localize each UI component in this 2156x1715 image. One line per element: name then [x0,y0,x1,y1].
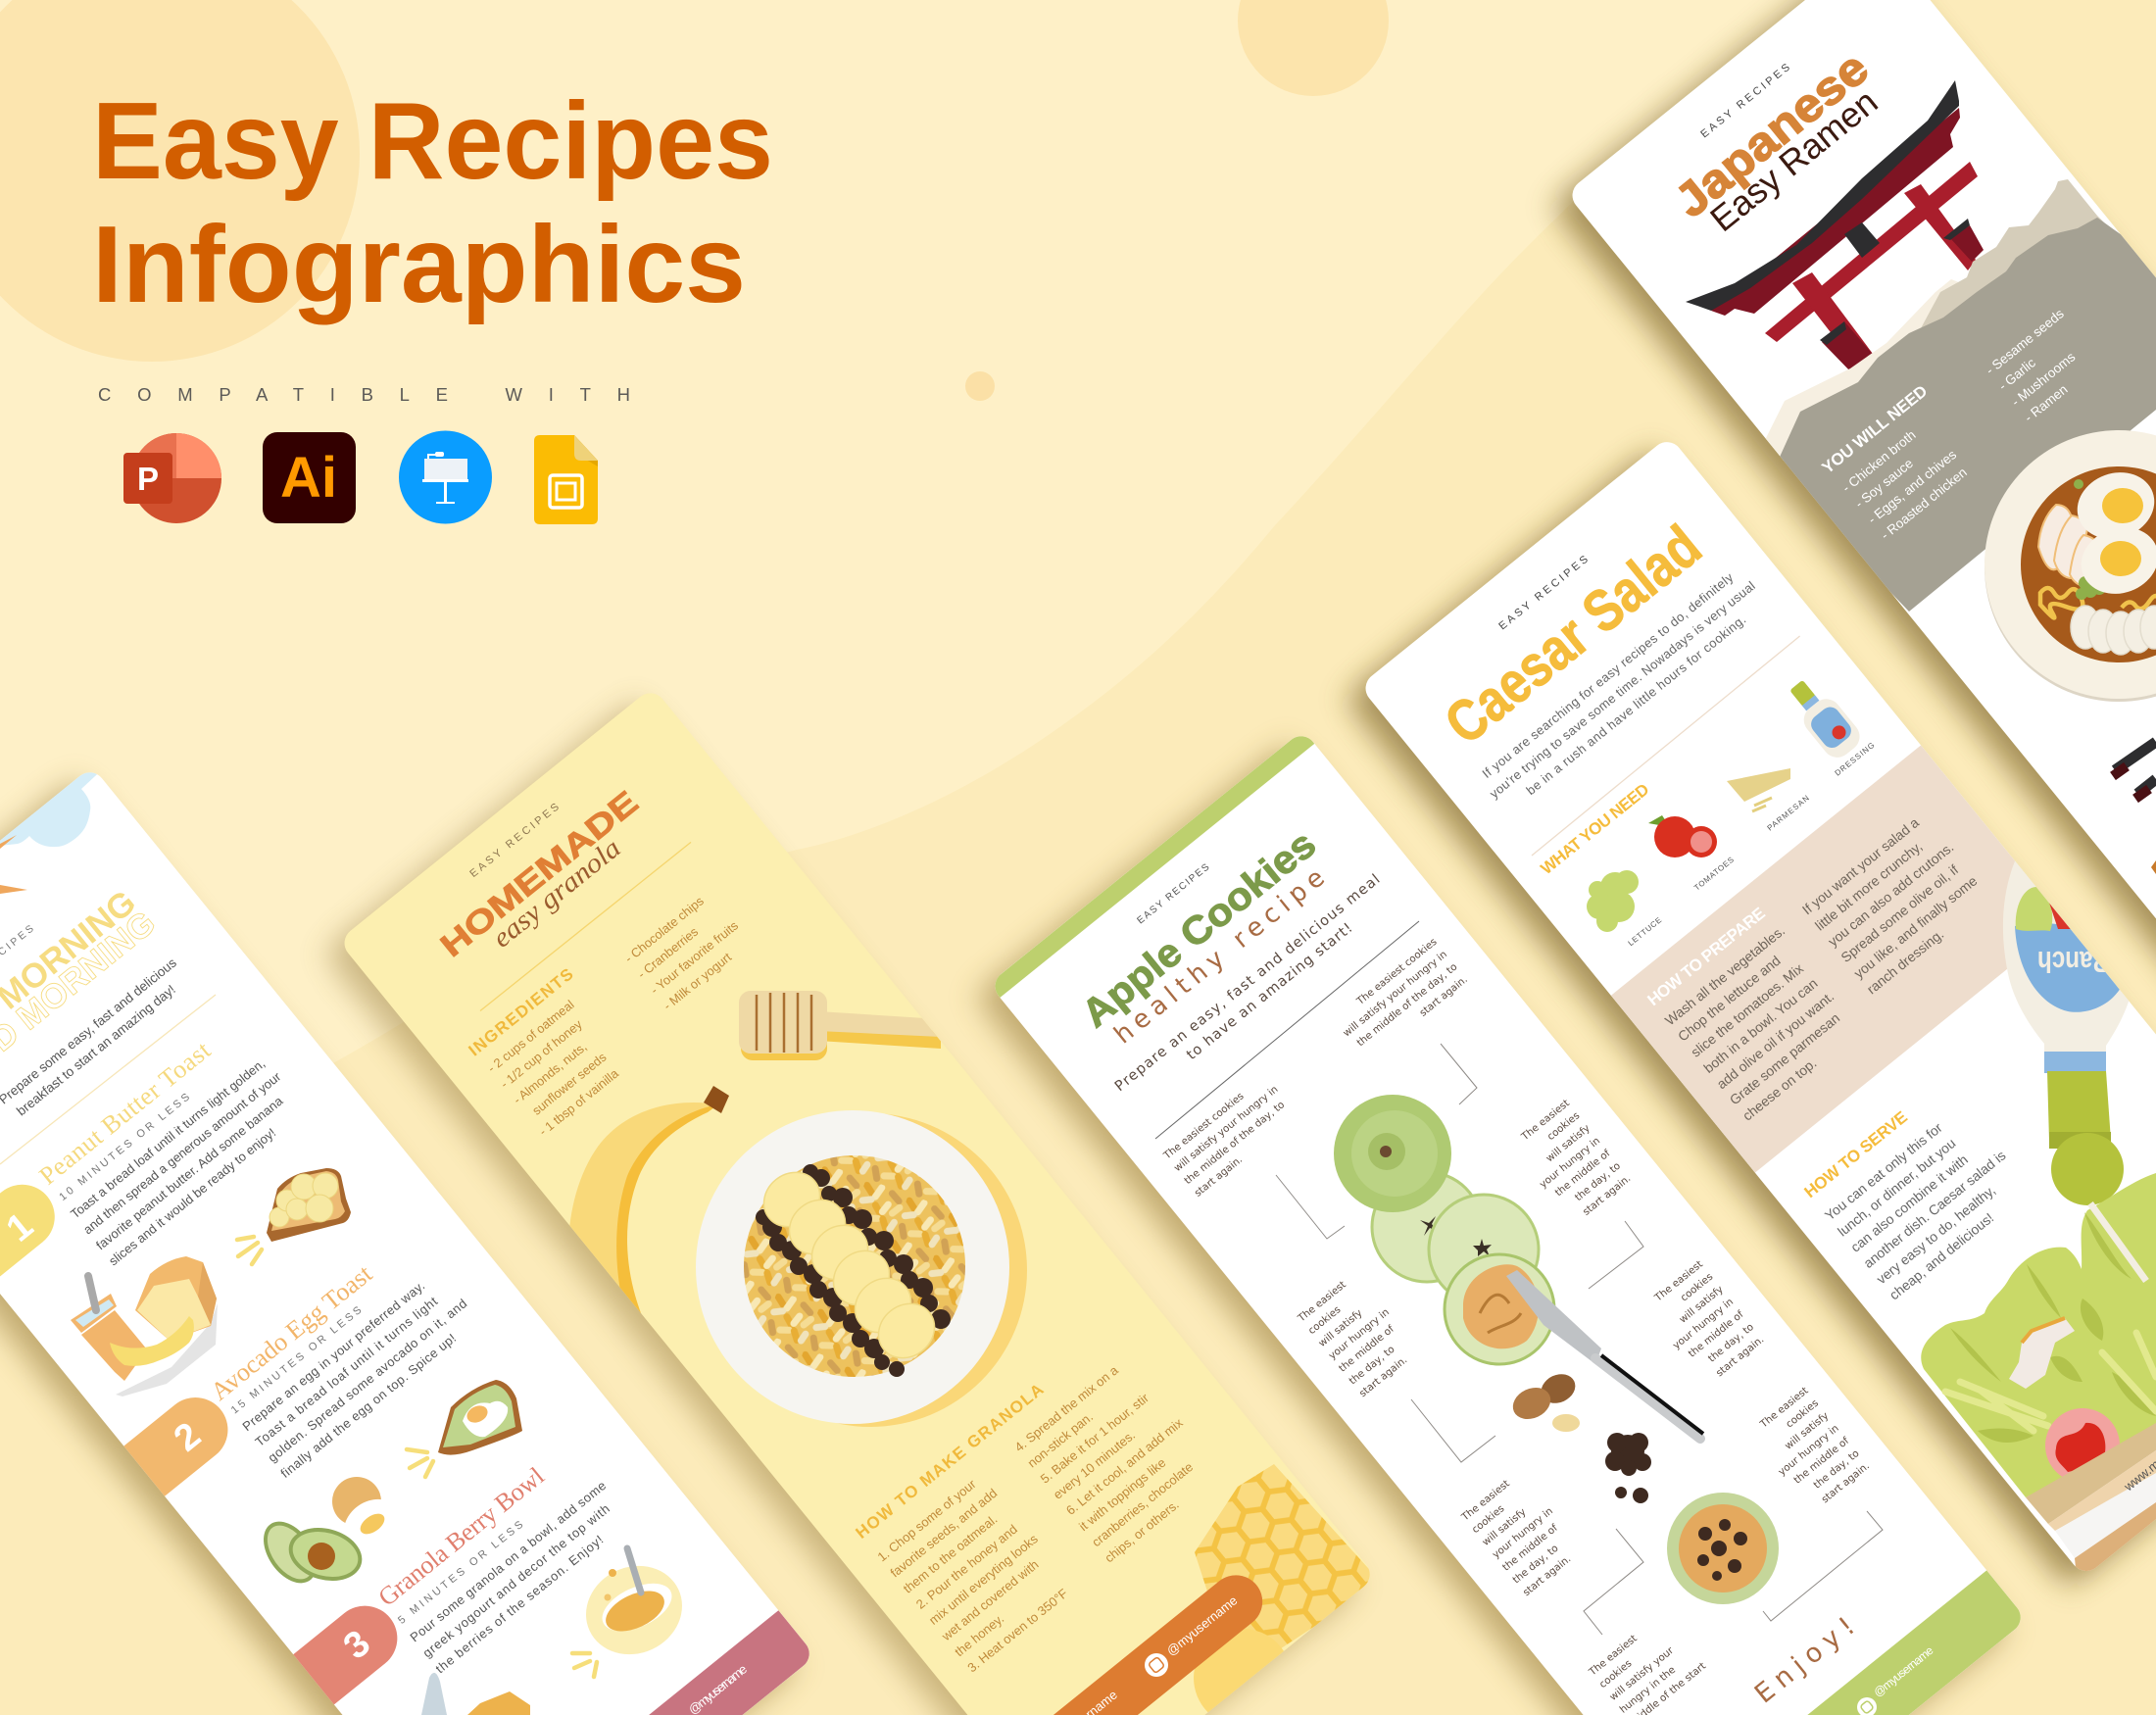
icon: avocado toast [438,1380,522,1455]
ingredients list left: - 1/2 cup of honey [498,1016,585,1091]
recipe 2 text: 15 MINUTES OR LESS [229,1304,364,1416]
icon: dressing bottle [1782,672,1866,763]
text block C: the day, to [1573,1160,1623,1203]
how to make heading: HOW TO MAKE GRANOLA [853,1380,1047,1543]
serve text: lunch, or dinner, but you [1835,1135,1958,1240]
card background [1359,436,2156,1577]
banana slices [753,1161,946,1369]
list right: - Sesame seeds [1983,306,2067,377]
title: Easy Recipes [92,80,773,202]
prepare text column 1: slice the tomatoes. Mix [1688,960,1806,1060]
steps column 2: it with toppings like [1076,1455,1168,1534]
icon: sparkle [407,1449,433,1477]
icon: eggs [332,1477,412,1563]
prepare text column 1: add olive oil if you want. [1714,988,1837,1092]
panel: Caesar Salad card [1359,436,2156,1588]
heading: caesar salad: Caesar Salad [1433,513,1713,757]
icon: sparkle [572,1653,597,1677]
text block F: The easiest [1757,1385,1810,1431]
text block G: your hungry in [1491,1505,1555,1561]
recipe 2 text: Avocado Egg Toast [205,1259,378,1406]
panel: Apple Cookies card [989,730,2027,1715]
icon: cookie [1667,1493,1779,1604]
list left: - Soy sauce [1852,456,1916,511]
noodles [2040,588,2156,617]
icon: PowerPoint [123,433,221,523]
icon: tomatoes [1648,815,1717,858]
ingredients list left: - Almonds, nuts, [511,1039,590,1107]
icon: Keynote [399,431,492,523]
card art [1611,745,2156,1588]
recipe 1 text: slices and it would be ready to enjoy! [106,1125,278,1268]
text block D: cookies [1306,1303,1344,1337]
enjoy text: Enjoy! [1749,1611,1861,1709]
icon: honey drop [1194,1629,1292,1715]
label: lettuce: LETTUCE [1627,915,1663,948]
easy recipes label: EASY RECIPES [1135,861,1212,926]
steps column 1: them to the oatmeal. [901,1511,1000,1596]
heading: easy recipes: EASY RECIPES [467,802,562,880]
recipe 1 text: Toast a bread loaf until it turns light golden, [68,1055,268,1221]
icon: banana [570,1086,729,1313]
label: parmesan: PARMESAN [1766,794,1811,833]
heading: homemade: HOMEMADE [433,783,645,963]
how to prepare heading: HOW TO PREPARE [1644,904,1769,1009]
serve text: very easy to do, healthy, [1874,1182,1998,1287]
recipe 3 text [372,1461,634,1676]
prepare text column 1: cheese on top. [1740,1054,1820,1124]
icon: knife [1506,1270,1703,1439]
icon: instagram [1145,1653,1168,1677]
icon: avocado [253,1512,368,1592]
label: tomatoes: TOMATOES [1692,856,1736,893]
prepare text column 2: If you want your salad a [1799,814,1922,917]
decorative circle top [1238,0,1389,96]
icon: granola pile [467,1691,530,1715]
icon: Google Slides [534,435,598,524]
intro text: you're trying to save some time. Nowadays is very usual [1487,578,1758,801]
text block E: The easiest [1652,1258,1705,1304]
list left: - Chicken broth [1839,427,1919,495]
icon: instagram [1857,1697,1877,1715]
recipe 1 text [33,1035,310,1268]
heading: apple cookies: Apple Cookies [1074,822,1324,1036]
recipe 3 text: greek yogourt and decor the top with [419,1501,612,1660]
icon: chopsticks [2113,742,2156,799]
recipe 2 text: golden. Spread some avocado on it, and [265,1296,469,1465]
decorative circle large [0,0,360,362]
eggs [2068,462,2156,605]
text block B: the middle of the day, to [1354,961,1459,1049]
prepare text column 2: ranch dressing. [1864,926,1946,997]
list right: - Mushrooms [2009,349,2079,410]
text block E: will satisfy [1677,1284,1726,1326]
text block G: the day, to [1510,1543,1561,1586]
text block F: cookies [1784,1397,1821,1431]
icon: granola plate [696,1110,1027,1427]
prepare text column 2: little bit more crunchy, [1812,838,1925,934]
fish cakes [2071,606,2156,655]
card background [989,730,2027,1715]
text block G: The easiest [1459,1478,1512,1524]
text block D: your hungry in [1327,1306,1392,1362]
text block B: will satisfy your hungry in [1341,949,1449,1039]
badge numbers: 2 [167,1415,209,1460]
text block F: will satisfy [1783,1410,1831,1452]
you will need heading: YOU WILL NEED [1819,381,1931,477]
text block C: your hungry in [1538,1135,1602,1191]
icon: Illustrator [263,432,356,523]
recipe 3 text: 5 MINUTES OR LESS [396,1519,525,1627]
footer handle: @myusername [1871,1643,1936,1699]
recipe 2 text: finally add the egg on top. Spice up! [277,1331,459,1481]
icon: banana toast [267,1168,351,1242]
recipe 1 text: 10 MINUTES OR LESS [57,1091,192,1203]
text block E: your hungry in [1671,1296,1736,1351]
icon: banana [110,1316,194,1366]
heading: easy ramen: Easy Ramen [1702,81,1886,239]
text block E: the day, to [1706,1321,1756,1365]
text block D: will satisfy [1316,1307,1365,1349]
recipe 3 text: Pour some granola on a bowl, add some [407,1478,609,1644]
recipe 1 text: and then spread a generous amount of your [80,1069,284,1237]
prepare text column 2: Spread some olive oil, if [1838,861,1961,965]
recipe 2 text: Prepare an egg in your preferred way. [239,1278,427,1434]
text block A: the middle of the day, to [1182,1099,1287,1187]
icon: apple and slices [1334,1095,1554,1364]
what you need heading: WHAT YOU NEED [1538,780,1652,878]
icon: ranch bottle [2003,853,2146,1205]
icon: torii gate [1686,80,1984,375]
ingredients list left: - 2 cups of oatmeal [484,997,577,1075]
text block E: the middle of [1687,1308,1746,1360]
list right: - Ramen [2022,382,2071,425]
serve text: another dish. Caesar salad is [1860,1148,2009,1271]
heading: healthy recipe: healthy recipe [1108,863,1331,1050]
intro text: If you are searching for easy recipes to do, definitely [1479,569,1737,781]
text block A: will satisfy your hungry in [1172,1084,1280,1174]
text block G: cookies [1470,1502,1507,1536]
card background [1566,0,2156,1083]
text block F: your hungry in [1776,1422,1841,1478]
icon: PowerPoint: P [137,461,159,497]
recipe 1 text: favorite peanut butter. Add some banana [93,1093,286,1252]
icon: honey dipper [739,991,941,1060]
intro text: breakfast to start an amazing day! [14,982,178,1118]
icon: salad [1921,1173,2156,1588]
text block H: hungry in the [1618,1664,1678,1715]
footer pill [941,1564,1273,1715]
list right: - Garlic [1996,355,2038,393]
label: dressing: DRESSING [1834,741,1876,778]
steps column 2: every 10 minutes. [1051,1428,1138,1502]
compatible with label: COMPATIBLE WITH [98,384,630,405]
recipe 2 text [205,1259,482,1481]
icon: granola bowl [571,1548,697,1670]
text block D: the middle of [1337,1323,1396,1375]
recipe 3 text: the berries of the season. Enjoy! [432,1532,606,1676]
steps column 2: 4. Spread the mix on a [1011,1362,1121,1454]
footer bar [649,1610,809,1715]
ingredients list right: - Your favorite fruits [648,918,741,998]
text block C: the middle of [1553,1148,1613,1199]
text block H: cookies [1597,1657,1635,1690]
icon: peanut butter jar [71,1276,147,1381]
steps column 1: 3. Heat oven to 350°F [964,1586,1070,1675]
icon: lettuce [1587,870,1639,932]
badge 1 [0,1184,55,1276]
text block C: The easiest [1519,1098,1572,1144]
steps column 2: non-stick pan. [1025,1409,1096,1470]
serve text: cheap, and delicious! [1886,1209,1996,1302]
footer handle: @myusername [1163,1592,1240,1658]
intro text: to have an amazing start! [1184,920,1355,1063]
text block B: start again. [1417,973,1470,1019]
steps column 1: favorite seeds, and add [888,1486,1000,1580]
title: Infographics [92,204,746,325]
list left: - Roasted chicken [1878,465,1970,543]
text block E: cookies [1679,1271,1715,1304]
decorative dot [965,371,995,401]
badge numbers: 1 [0,1205,41,1250]
ingredients list left: - 1 tbsp of vainilla [536,1065,622,1139]
ingredients list right: - Cranberries [635,924,701,981]
text block F: start again. [1819,1460,1872,1505]
steps column 1: wet and covered with [938,1557,1042,1644]
text block A: The easiest cookies [1161,1090,1247,1162]
ingredients list right: - Chocolate chips [621,894,707,965]
steps column 2: cranberries, chocolate [1089,1459,1196,1549]
icon: ramen bowl [1984,430,2156,702]
prepare text column 1: Chop the lettuce and [1675,953,1784,1045]
steps column 1: the honey. [952,1611,1006,1659]
spring onion [2074,479,2106,600]
chicken [2038,505,2099,586]
title [92,80,773,325]
text block C: start again. [1581,1172,1633,1218]
text block D: The easiest [1296,1279,1348,1325]
badge 3 [293,1605,398,1705]
steps column 1: 2. Pour the honey and [913,1522,1020,1612]
text block C: will satisfy [1544,1122,1592,1164]
recipe 3 text: Granola Berry Bowl [372,1461,550,1612]
badge numbers [0,1205,378,1668]
icon: sparkle [237,1237,262,1264]
icon: bread loaf [135,1256,217,1341]
icon: chocolate pile [1605,1433,1651,1503]
chocolate chips [756,1164,951,1377]
badge 2 [123,1397,227,1496]
text block G: start again. [1521,1553,1573,1598]
prepare text column 1: Wash all the vegetables. [1662,922,1788,1028]
card background [0,766,815,1715]
recipe 1 text: Peanut Butter Toast [33,1035,217,1191]
card art and colour blocks [0,764,815,1715]
steps column 1: 1. Chop some of your [874,1476,979,1564]
steps column 2: 6. Let it cool, and add mix [1063,1415,1186,1518]
steps column 1: mix until everyting looks [926,1531,1041,1628]
panel: Homemade granola card [338,687,1377,1715]
text block E: start again. [1714,1334,1766,1379]
prepare text column 2: you like, and finally some [1851,872,1981,981]
prepare text column 2: you can also add crutons. [1825,839,1956,950]
steps column 2: 5. Bake it for 1 hour, stir [1038,1390,1152,1487]
panel: Japanese Ramen card [1566,0,2156,1083]
icon: jar shadow [116,1303,218,1396]
prepare text column 1: both in a bowl. You can [1700,975,1821,1076]
recipe 2 text: Toast a bread loaf until it turns light [252,1294,440,1449]
how to serve heading: HOW TO SERVE [1801,1107,1911,1201]
serve text: You can eat only this for [1822,1119,1945,1223]
text block D: start again. [1357,1354,1409,1399]
ingredients list left: sunflower seeds [529,1050,609,1118]
easy recipes label: EASY RECIPES [1698,62,1792,140]
intro text: be in a rush and have little hours for cooking. [1523,612,1748,798]
intro text: Prepare some easy, fast and delicious [0,956,179,1107]
prepare text column 1: Grate some parmesan [1727,1009,1842,1107]
intro text: Prepare an easy, fast and delicious meal [1112,872,1383,1095]
colour bands [989,730,2027,1715]
text block G: the middle of [1500,1522,1560,1574]
text block H: The easiest [1587,1633,1640,1679]
badge numbers: 3 [336,1623,378,1668]
heading: japanese: Japanese [1666,42,1879,228]
icon: ranch bottle: Ranch [2037,945,2110,979]
icon: parmesan [1727,768,1790,811]
easy recipes label: EASY RECIPES [1496,554,1591,632]
text block F: the middle of [1791,1435,1851,1487]
steps column 2: chips, or others. [1102,1497,1182,1565]
text block H: will satisfy your [1607,1644,1677,1703]
icon: spoon and jar [421,1673,447,1715]
icon: garnish [2151,860,2156,874]
text block C: cookies [1545,1109,1582,1143]
icon: Illustrator: Ai [280,446,337,510]
blue cloud [0,772,97,847]
text block G: will satisfy [1480,1506,1529,1548]
text block F: the day, to [1811,1447,1862,1492]
ingredients list right: - Milk or yogurt [661,950,734,1013]
text block A: start again. [1193,1153,1245,1200]
text block D: the day, to [1347,1344,1397,1387]
mountains and ingredient panel [1754,179,2156,612]
panel: Good Morning card [0,764,815,1715]
list left: - Eggs, and chives [1865,447,1959,527]
icon: peanuts [1508,1369,1580,1432]
serve text: can also combine it with [1847,1152,1971,1255]
tan block [1611,745,2065,1173]
ingredients heading: INGREDIENTS [466,964,577,1060]
icon: honeycomb [1195,1464,1377,1664]
card art [568,991,1377,1715]
text block B: The easiest cookies [1354,936,1440,1007]
heading: easy granola: easy granola [487,833,626,954]
card background [338,687,1376,1715]
